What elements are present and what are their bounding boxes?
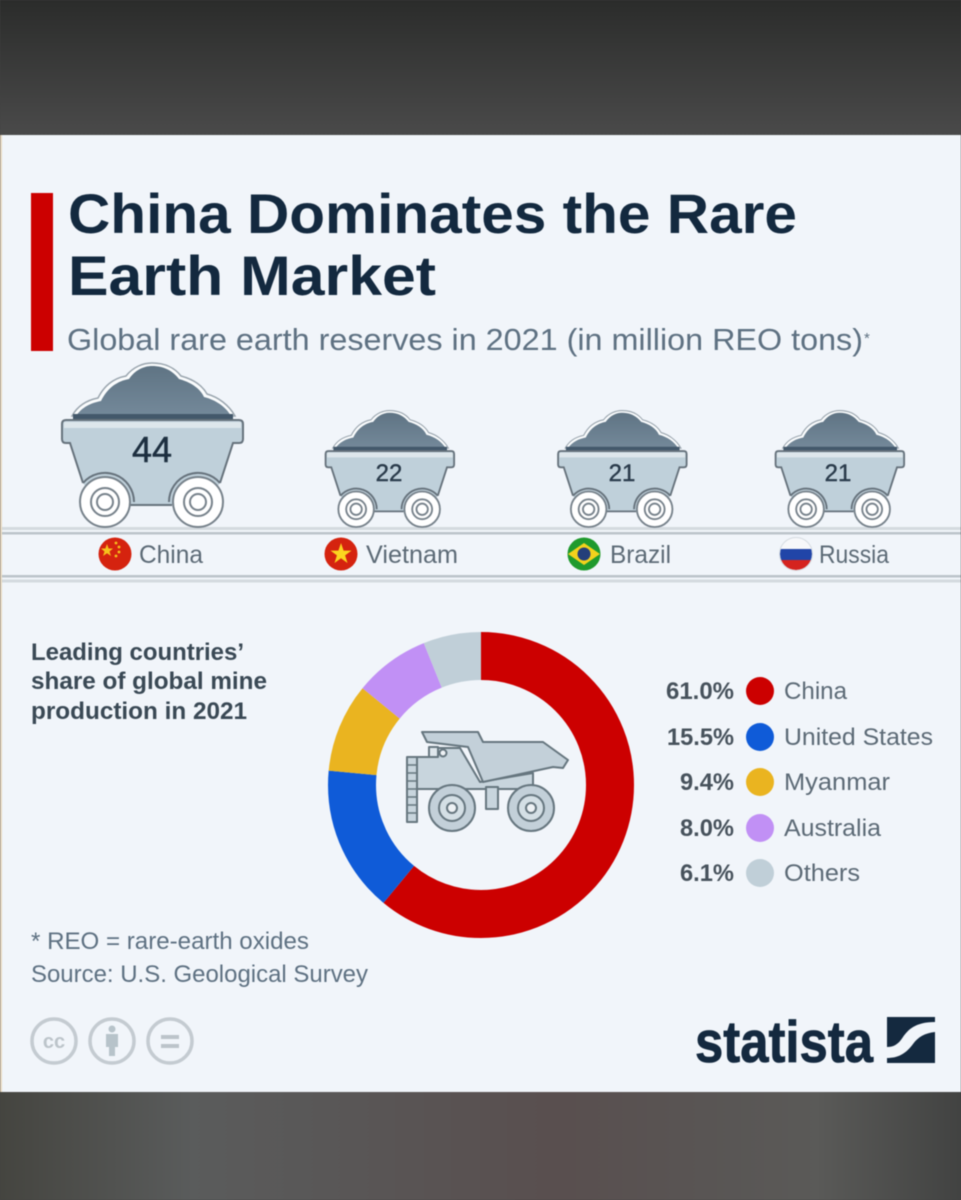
label: Vietnam: Vietnam [366,541,458,569]
subtitle: * [864,330,870,347]
footnote and source: Source: U.S. Geological Survey [31,961,368,988]
legend [666,677,933,887]
label: Brazil: Brazil [610,541,671,569]
legend row: China: 61.0% [666,678,734,705]
wagon: Russia 21 [776,411,904,527]
wagon: China 44 [62,363,243,527]
icon: China flag [98,538,132,570]
title: Earth Market [68,244,436,307]
heading: donut description: share of global mine [31,668,267,695]
heading: donut description [31,639,267,725]
background: top dark band [0,0,961,135]
icon: Russia flag [779,537,813,571]
icon: mining dump truck [407,732,568,831]
legend row: Myanmar [680,768,890,796]
icon: Vietnam flag [324,538,358,570]
legend row: Others: 6.1% [680,860,734,887]
legend row: United States: 15.5% [667,724,734,751]
legend row: Australia [680,814,881,842]
value: 44: 44 [132,429,172,470]
title accent bar [31,193,53,351]
icon: attribution [90,1019,134,1063]
legend row: Others: Others [784,860,860,887]
rail: lower [2,575,961,582]
logo: statista wordmark: statista [695,1010,874,1075]
logo: statista mark [887,1017,935,1063]
icon: creative commons: cc [43,1031,65,1053]
value: 21 Brazil: 21 [609,460,635,487]
title: China Dominates the Rare [68,182,797,245]
legend row: United States [667,723,933,751]
legend row: Australia: Australia [784,815,881,842]
label: Russia: Russia [819,541,889,569]
donut chart [352,656,610,914]
legend row: Myanmar: 9.4% [680,769,734,796]
legend row: Others [680,859,860,887]
legend row: China [666,677,847,705]
legend row: United States: United States [784,724,933,751]
heading: donut description: Leading countries’ [31,639,244,666]
wagon: Vietnam 22 [326,411,454,527]
title [68,182,797,307]
footnote and source: * REO = rare-earth oxides [31,928,309,955]
rail: upper [2,527,961,534]
panel: infographic card [0,135,961,1092]
background: bottom dark band [0,1092,961,1200]
subtitle: Global rare earth reserves in 2021 (in million REO tons) [67,322,863,357]
icon: Brazil flag [568,538,600,570]
heading: donut description: production in 2021 [31,698,247,725]
footnote and source [31,928,368,988]
legend row: Australia: 8.0% [680,815,734,842]
value: 21 Russia: 21 [825,460,851,487]
label: China: China [139,541,203,569]
value: 22: 22 [376,460,402,487]
icon: creative commons [32,1019,76,1063]
wagon: Brazil 21 [558,411,687,527]
legend row: China: China [784,678,847,705]
legend row: Myanmar: Myanmar [784,769,890,796]
icon: no derivatives [148,1019,192,1063]
